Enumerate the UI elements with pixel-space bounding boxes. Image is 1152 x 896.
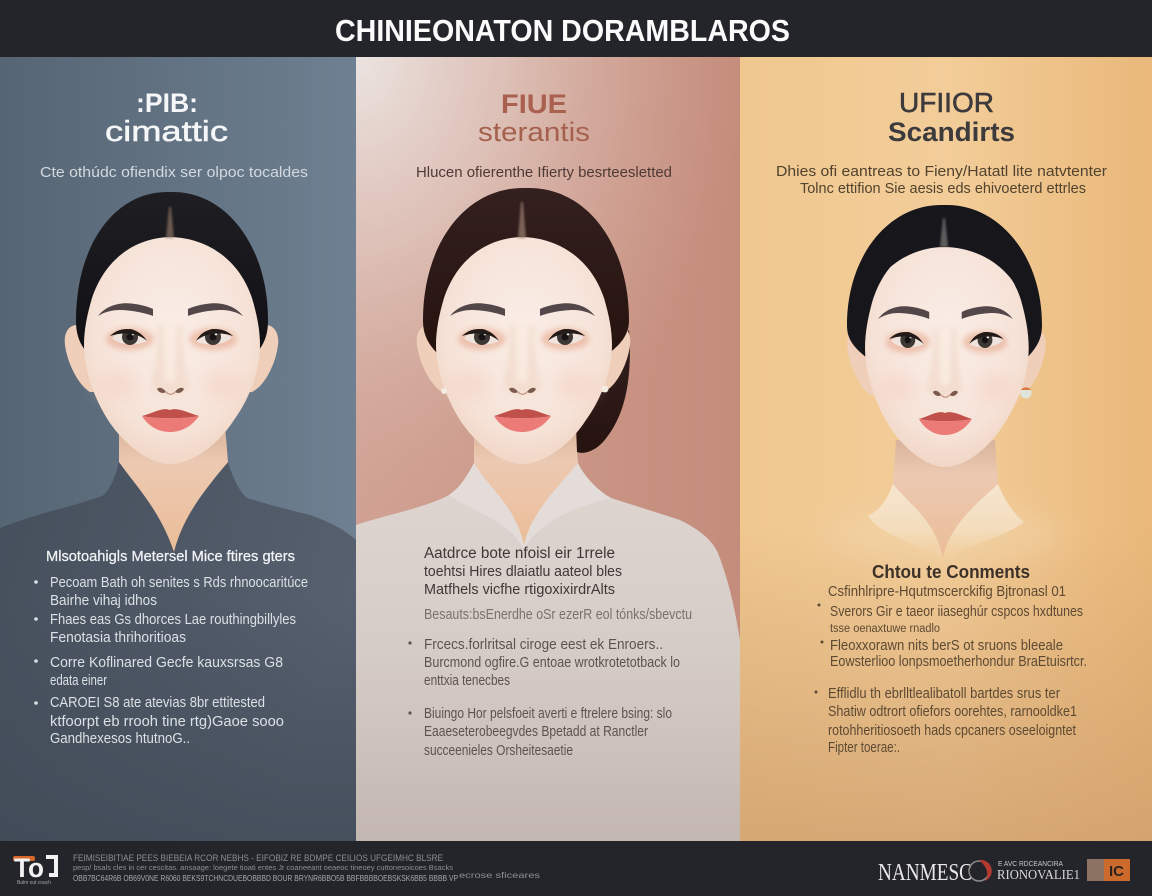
footer badge bbox=[1087, 859, 1130, 881]
sub note: Besauts:bsEnerdhe oSr ezerR eol tónks/sbevctu bbox=[424, 607, 692, 623]
bullet item 2 bbox=[408, 706, 672, 759]
intro line: Csfinhlripre-Hqutmscerckifig Bjtronasl 01 bbox=[828, 584, 1066, 600]
bullet item 1: Pecoam Bath oh senites s Rds rhnoocaritúce bbox=[50, 575, 308, 591]
bullet item 2: Eowsterlioo lonpsmoetherhondur BraEtuisrtcr. bbox=[830, 654, 1087, 670]
bullet item 1: enttxia tenecbes bbox=[424, 673, 510, 689]
bullet item 4: Gandhexesos htutnoG.. bbox=[50, 731, 190, 747]
panel heading: left: :PIB: bbox=[136, 88, 198, 118]
intro paragraph: toehtsi Hires dlaiatlu aateol bles bbox=[424, 564, 622, 580]
bullet item 1 bbox=[408, 637, 680, 689]
footer wordmark with icon: RIONOVALIE1 bbox=[997, 868, 1080, 883]
intro paragraph bbox=[424, 545, 622, 598]
panel heading: right bbox=[888, 87, 1015, 147]
bullet item 3: rotohheritiosoeth hads cpcaners oseeloigntet bbox=[828, 723, 1076, 739]
bullet item 2 bbox=[820, 638, 1087, 670]
footer badge: IC bbox=[1109, 863, 1124, 880]
panel heading: middle: FIUE bbox=[501, 89, 567, 119]
bullet item 2: Biuingo Hor pelsfoeit averti e ftrelere bsing: slo bbox=[424, 706, 672, 722]
panel intro: right bbox=[776, 164, 1107, 197]
bullet item 3: Corre Koflinared Gecfe kauxsrsas G8 bbox=[50, 655, 283, 671]
footer fine print bbox=[73, 853, 540, 883]
panel intro: middle: Hlucen ofierenthe Ifierty besrteesletted bbox=[416, 165, 672, 181]
bullet item 3: edata einer bbox=[50, 673, 107, 689]
bullet item 2: Fhaes eas Gs dhorces Lae routhingbillyles bbox=[50, 612, 296, 628]
footer fine print: FEIMISEIBITIAE PEES BIEBEIA RCOR NEBHS - EIFOBIZ RE BDMPE CEILIOS UFGEIMHC BLSRE bbox=[73, 853, 443, 864]
bullet item 3 bbox=[34, 655, 283, 689]
bullet item 3: Efflidlu th ebrlltlealibatoll bartdes srus ter bbox=[828, 686, 1060, 702]
intro paragraph: Aatdrce bote nfoisl eir 1rrele bbox=[424, 545, 615, 562]
panel: right background bbox=[740, 57, 1152, 842]
bullet item 2: Eaaeseterobeegvdes Bpetadd at Ranctler bbox=[424, 724, 648, 740]
header bar bbox=[0, 0, 1152, 57]
bullet item 1: Bairhe vihaj idhos bbox=[50, 593, 157, 609]
footer logo: To bbox=[14, 853, 44, 883]
footer bar bbox=[0, 841, 1152, 896]
panel heading: left bbox=[105, 88, 228, 148]
list heading: Chtou te Conments bbox=[872, 562, 1030, 582]
panel intro: left: Cte othúdc ofiendix ser olpoc tocaldes bbox=[40, 165, 308, 181]
bullet item 4: CAROEI S8 ate atevias 8br ettitested bbox=[50, 695, 265, 711]
list heading: Mlsotoahigls Metersel Mice ftires gters bbox=[46, 549, 295, 565]
bullet item 2 bbox=[34, 612, 296, 646]
panel intro: right: Tolnc ettifion Sie aesis eds ehivoeterd ettrles bbox=[800, 181, 1086, 197]
bullet item 2: Fenotasia thrihoritioas bbox=[50, 630, 186, 646]
bullet item 4 bbox=[34, 695, 284, 747]
bullet item 1: Burcmond ogfire.G entoae wrotkrotetotback lo bbox=[424, 655, 680, 671]
bullet item 3: Shatiw odtrort ofiefors oorehtes, rarnooldke1 bbox=[828, 704, 1077, 720]
panel intro: right: Dhies ofi eantreas to Fieny/Hatatl lite natvtenter bbox=[776, 164, 1107, 180]
portrait: left woman bbox=[0, 192, 356, 842]
footer wordmark with icon: NANMESC bbox=[878, 860, 972, 886]
panel heading: middle: sterantis bbox=[478, 117, 590, 147]
panel heading: right: Scandirts bbox=[888, 117, 1015, 147]
intro paragraph: Matfhels vicfhe rtigoxixirdrAlts bbox=[424, 582, 615, 598]
footer fine print: ecrose sficeares bbox=[459, 870, 540, 880]
bullet item 1: Frcecs.forlritsal ciroge eest ek Enroers.. bbox=[424, 637, 663, 653]
footer wordmark with icon: E AVC RDCEANCIRA bbox=[998, 859, 1063, 868]
title: CHINIEONATON DORAMBLAROS bbox=[335, 13, 790, 48]
bullet item 3 bbox=[814, 686, 1077, 756]
portrait: middle woman bbox=[356, 188, 740, 842]
footer fine print: pesp/ bsals cles in cer cescitas. ansaage: loegete tioati entes Jr coaneeant oeaeoc tineoey cuttonesoicoes Bsacks bbox=[73, 865, 454, 872]
panel heading: middle bbox=[478, 89, 590, 147]
panel heading: left: cimattic bbox=[105, 116, 228, 148]
text block: right panel list bbox=[814, 562, 1087, 756]
bullet item 2: Fleoxxorawn nits berS ot sruons bleeale bbox=[830, 638, 1063, 654]
footer logo bbox=[13, 853, 58, 886]
footer fine print: OBB7BC64R6B OB69V0NE R6060 BEKS9TCHNCDUEBOBBBD BOUR BRYNR6BBO5B BBFBBBBOEBSKSK6BB5 BBBB VP bbox=[73, 873, 458, 883]
panel: left cinematic background bbox=[0, 57, 357, 842]
panel heading: right: UFIIOR bbox=[899, 87, 994, 118]
footer logo: Balm out coach bbox=[17, 880, 51, 886]
bullet item 1: tsse oenaxtuwe rnadlo bbox=[830, 623, 940, 635]
panel: middle background bbox=[356, 57, 741, 842]
footer wordmark with icon bbox=[878, 859, 1080, 886]
portrait: right woman bbox=[824, 205, 1064, 565]
text block: left panel list bbox=[34, 549, 308, 747]
bullet item 3: Fipter toerae:. bbox=[828, 740, 900, 756]
bullet item 1: Sverors Gir e taeor iiaseghúr cspcos hxdtunes bbox=[830, 604, 1083, 620]
bullet item 2: succeenieles Orsheitesaetie bbox=[424, 743, 573, 759]
bullet item 4: ktfoorpt eb rrooh tine rtg)Gaoe sooo bbox=[50, 714, 284, 730]
bullet item 1 bbox=[818, 604, 1083, 635]
bullet item 1 bbox=[34, 575, 308, 609]
text block: middle panel list bbox=[408, 545, 692, 759]
